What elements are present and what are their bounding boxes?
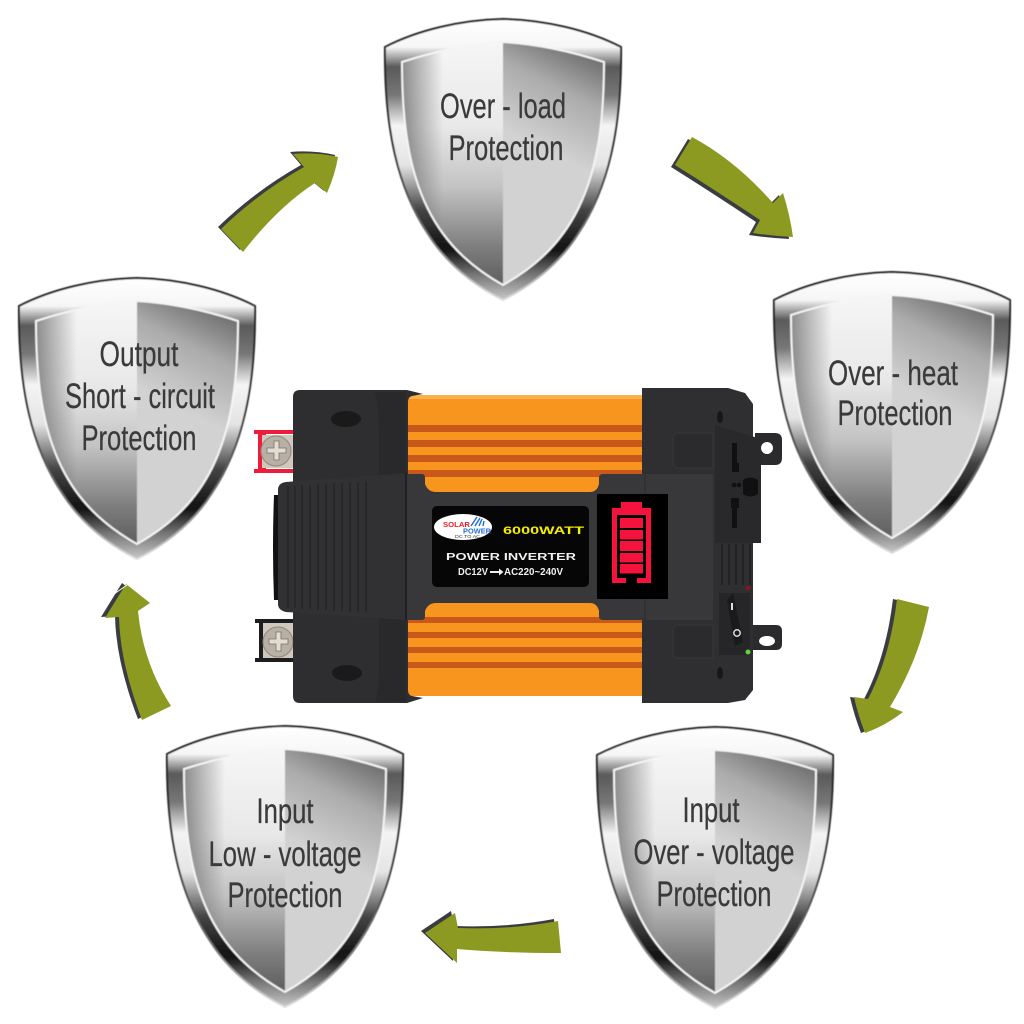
shield label: Input Over-voltage Protection: Input	[682, 791, 740, 830]
red LED	[746, 586, 750, 590]
mounting ear upper	[755, 433, 782, 465]
arrow: overheat to over-voltage	[850, 599, 929, 733]
arrow: low-voltage to short-circuit	[101, 583, 171, 720]
orange body	[405, 395, 645, 696]
centre band	[407, 474, 713, 620]
shield label: Input Low-voltage Protection: Low - voltage	[208, 835, 362, 874]
terminal: negative black	[255, 619, 293, 662]
shield label: Input Low-voltage Protection: Protection	[228, 876, 342, 915]
shield label: Over-heat Protection: Over - heat	[828, 354, 958, 393]
mounting slot top	[331, 411, 361, 427]
mounting ear lower	[753, 625, 782, 650]
arrow: over-voltage to low-voltage	[421, 911, 561, 963]
shield: Over-load Protection	[385, 19, 621, 300]
shield label: Input Over-voltage Protection: Protection	[656, 875, 772, 914]
screw holes on right cap	[717, 411, 723, 423]
brand logo: POWER	[463, 526, 492, 536]
left end cap	[293, 390, 423, 703]
wattage: 6000WATT	[503, 525, 584, 537]
shield: Input Over-voltage Protection	[597, 727, 833, 1008]
vent ribs	[722, 544, 750, 585]
shield: Input Low-voltage Protection	[167, 726, 403, 1007]
shield label: Input Low-voltage Protection	[208, 792, 362, 915]
voltage spec	[458, 567, 563, 578]
voltage spec: AC220~240V	[504, 567, 563, 578]
shield label: Output Short-circuit Protection	[65, 335, 215, 458]
shield label: Input Over-voltage Protection	[634, 791, 794, 914]
brand logo: DC TO AC	[455, 534, 481, 539]
power inverter product	[254, 388, 782, 703]
shield label: Over-load Protection	[440, 87, 566, 168]
shield label: Input Over-voltage Protection: Over - voltage	[634, 833, 794, 872]
shield label: Output Short-circuit Protection: Protection	[82, 419, 196, 458]
rocker switch	[719, 593, 750, 655]
arrow: overload to overheat	[671, 137, 793, 239]
shield label: Input Low-voltage Protection: Input	[256, 792, 314, 831]
brand logo: SOLAR	[443, 520, 471, 529]
brand logo	[434, 514, 492, 540]
shield: Over-heat Protection	[774, 272, 1010, 553]
product label	[432, 506, 589, 587]
voltage spec: DC12V	[458, 567, 488, 578]
right end cap	[642, 388, 753, 703]
product name: POWER INVERTER	[446, 551, 577, 563]
mounting slot bottom	[332, 665, 362, 681]
terminal: positive red	[254, 430, 293, 473]
shield label: Over-load Protection: Protection	[448, 129, 564, 168]
green LED	[746, 650, 750, 654]
battery indicator	[597, 494, 668, 599]
shield label: Over-load Protection: Over - load	[440, 87, 566, 126]
shield label: Output Short-circuit Protection: Output	[100, 335, 179, 374]
shield label: Over-heat Protection	[828, 354, 958, 433]
left strap	[273, 473, 406, 620]
arrow: short-circuit to overload	[218, 151, 338, 252]
shield: Output Short-circuit Protection	[19, 278, 255, 559]
AC socket	[715, 425, 761, 543]
shield label: Output Short-circuit Protection: Short - circuit	[65, 377, 215, 416]
shield label: Over-heat Protection: Protection	[838, 394, 952, 433]
